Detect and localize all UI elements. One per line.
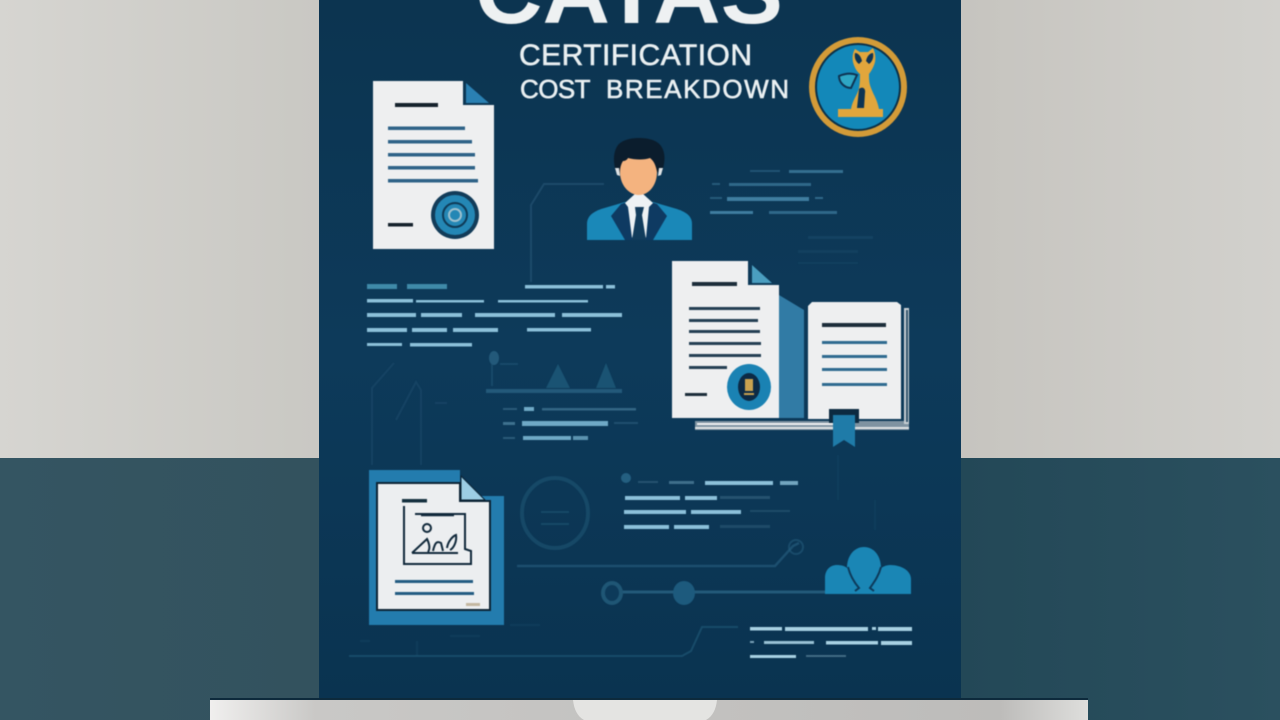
stand base <box>210 698 1088 720</box>
document with image, lower left <box>369 470 504 625</box>
faint connector behind person <box>531 184 604 282</box>
icon: document seal <box>431 191 479 239</box>
subtitle line 1: CERTIFICATION <box>519 39 752 72</box>
connector line with nodes <box>517 540 830 605</box>
text block centre <box>503 407 638 440</box>
wall left <box>0 0 319 458</box>
icon: gold medal badge <box>809 37 907 137</box>
book base <box>695 308 909 430</box>
poster panel <box>349 0 912 658</box>
text block middle left <box>367 284 622 346</box>
icon: cloud <box>825 547 911 594</box>
document and open book <box>672 261 909 447</box>
icon: picture frame <box>404 506 471 564</box>
icon: person in suit <box>587 138 692 240</box>
floor left <box>0 458 319 720</box>
book right page <box>808 302 901 419</box>
subtitle line 2: COST <box>520 74 591 104</box>
text block lower right <box>750 627 912 658</box>
wall right <box>961 0 1280 458</box>
document: certificate top left <box>373 81 494 249</box>
floor right <box>961 458 1280 720</box>
book inner page blue <box>779 295 804 418</box>
bookmark <box>829 409 859 447</box>
poster background <box>319 0 961 700</box>
icon: certificate seal <box>727 364 771 410</box>
faint lower connector <box>349 455 875 656</box>
faint text block upper right <box>710 170 873 264</box>
faint diagram middle <box>372 351 622 465</box>
subtitle line 2: BREAKDOWN <box>606 74 789 104</box>
faint ring badge <box>522 478 588 548</box>
text block lower centre <box>621 473 798 529</box>
certificate document <box>672 261 779 418</box>
